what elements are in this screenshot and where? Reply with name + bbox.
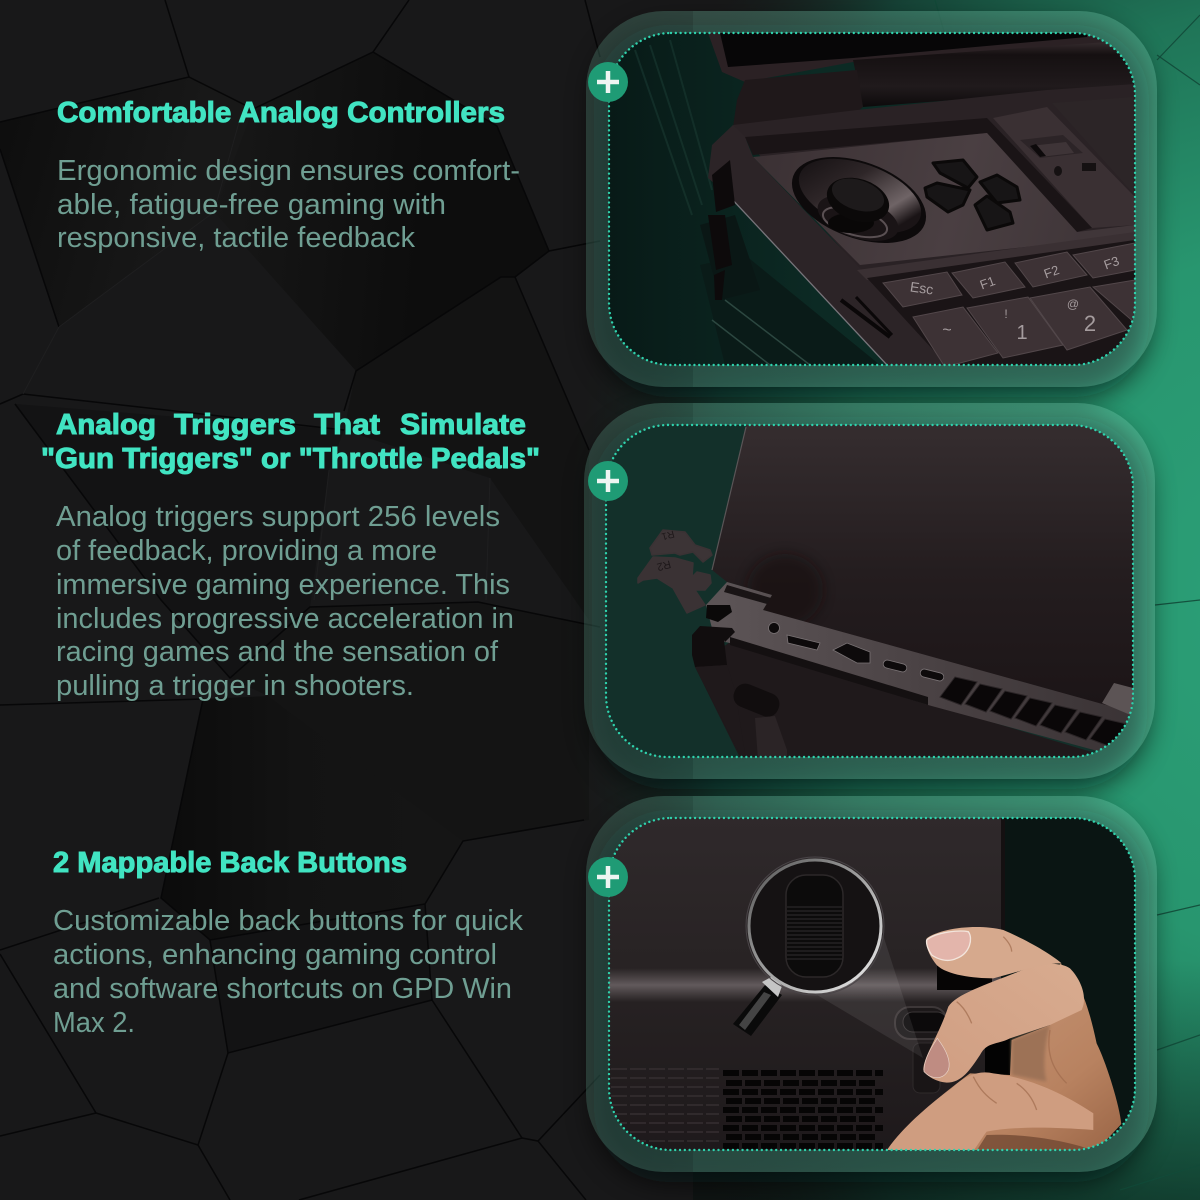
triggers R1 and R2: R1 <box>660 528 675 542</box>
text block: analog triggers: includes progressive acceleration in <box>56 603 514 635</box>
text block: analog controllers: Ergonomic design ensures comfort- <box>57 155 520 187</box>
heading: comfortable analog controllers: Comfortable Analog Controllers <box>57 97 505 129</box>
keyboard keys: F2 <box>1042 262 1061 281</box>
keyboard keys: Esc <box>909 279 934 298</box>
dotted border <box>609 818 1135 1150</box>
text block: back buttons: and software shortcuts on GPD Win <box>53 973 512 1005</box>
magnifier <box>733 857 884 1036</box>
keyboard keys: 2 <box>1084 311 1096 336</box>
text block: back buttons: actions, enhancing gaming control <box>53 939 497 971</box>
icon: plus badge <box>588 461 628 501</box>
device photo: ports and triggers <box>606 425 1135 770</box>
panel: analog controllers <box>586 11 1157 397</box>
panel: back buttons <box>586 796 1157 1182</box>
vent grille <box>611 1069 883 1146</box>
keyboard keys: ! <box>1004 307 1008 321</box>
triggers R1 and R2: R2 <box>655 557 672 573</box>
keyboard keys <box>883 243 1135 367</box>
ports <box>768 622 945 682</box>
heading: analog triggers: "Gun Triggers" or "Throttle Pedals" <box>41 443 540 475</box>
heading: analog triggers <box>41 409 540 475</box>
text block: analog triggers: of feedback, providing a more <box>56 535 437 567</box>
text block: analog triggers <box>56 501 514 702</box>
d-pad <box>925 160 1020 230</box>
text block: analog triggers: Analog triggers support 256 levels <box>56 501 500 533</box>
keyboard keys: ~ <box>942 322 952 339</box>
vents <box>940 677 1127 747</box>
keyboard keys: F1 <box>978 273 997 292</box>
text block: back buttons: Customizable back buttons for quick <box>53 905 524 937</box>
dotted border <box>609 33 1135 365</box>
keyboard keys: @ <box>1067 297 1079 311</box>
keyboard keys: 1 <box>1016 322 1028 344</box>
panel: analog triggers <box>584 403 1155 789</box>
heading: analog triggers: Triggers <box>174 409 296 441</box>
triggers R1 and R2 <box>638 528 712 613</box>
text block: analog triggers: immersive gaming experience. This <box>56 569 510 601</box>
device photo: joystick and keyboard <box>609 33 1135 367</box>
icon: plus badge <box>588 857 628 897</box>
heading: analog triggers: Analog <box>56 409 156 441</box>
text block: analog controllers <box>57 155 520 254</box>
keyboard keys: F3 <box>1102 253 1121 272</box>
text block: back buttons <box>53 905 524 1039</box>
heading: analog triggers: That <box>314 409 380 441</box>
heading: analog triggers: Simulate <box>400 409 526 441</box>
text block: analog controllers: able, fatigue-free gaming with <box>57 189 446 221</box>
dotted border <box>606 425 1133 757</box>
device photo: hand on back button <box>609 818 1135 1151</box>
text block: analog controllers: responsive, tactile feedback <box>57 222 415 254</box>
text block: analog triggers: racing games and the sensation of <box>56 636 499 668</box>
text block: back buttons: Max 2. <box>53 1007 135 1039</box>
hand <box>887 927 1121 1151</box>
joystick <box>792 157 926 243</box>
text block: analog triggers: pulling a trigger in shooters. <box>56 670 414 702</box>
mode switch <box>1020 135 1096 176</box>
physical back button <box>812 935 947 1093</box>
icon: plus badge <box>588 62 628 102</box>
heading: back buttons: 2 Mappable Back Buttons <box>53 847 407 879</box>
